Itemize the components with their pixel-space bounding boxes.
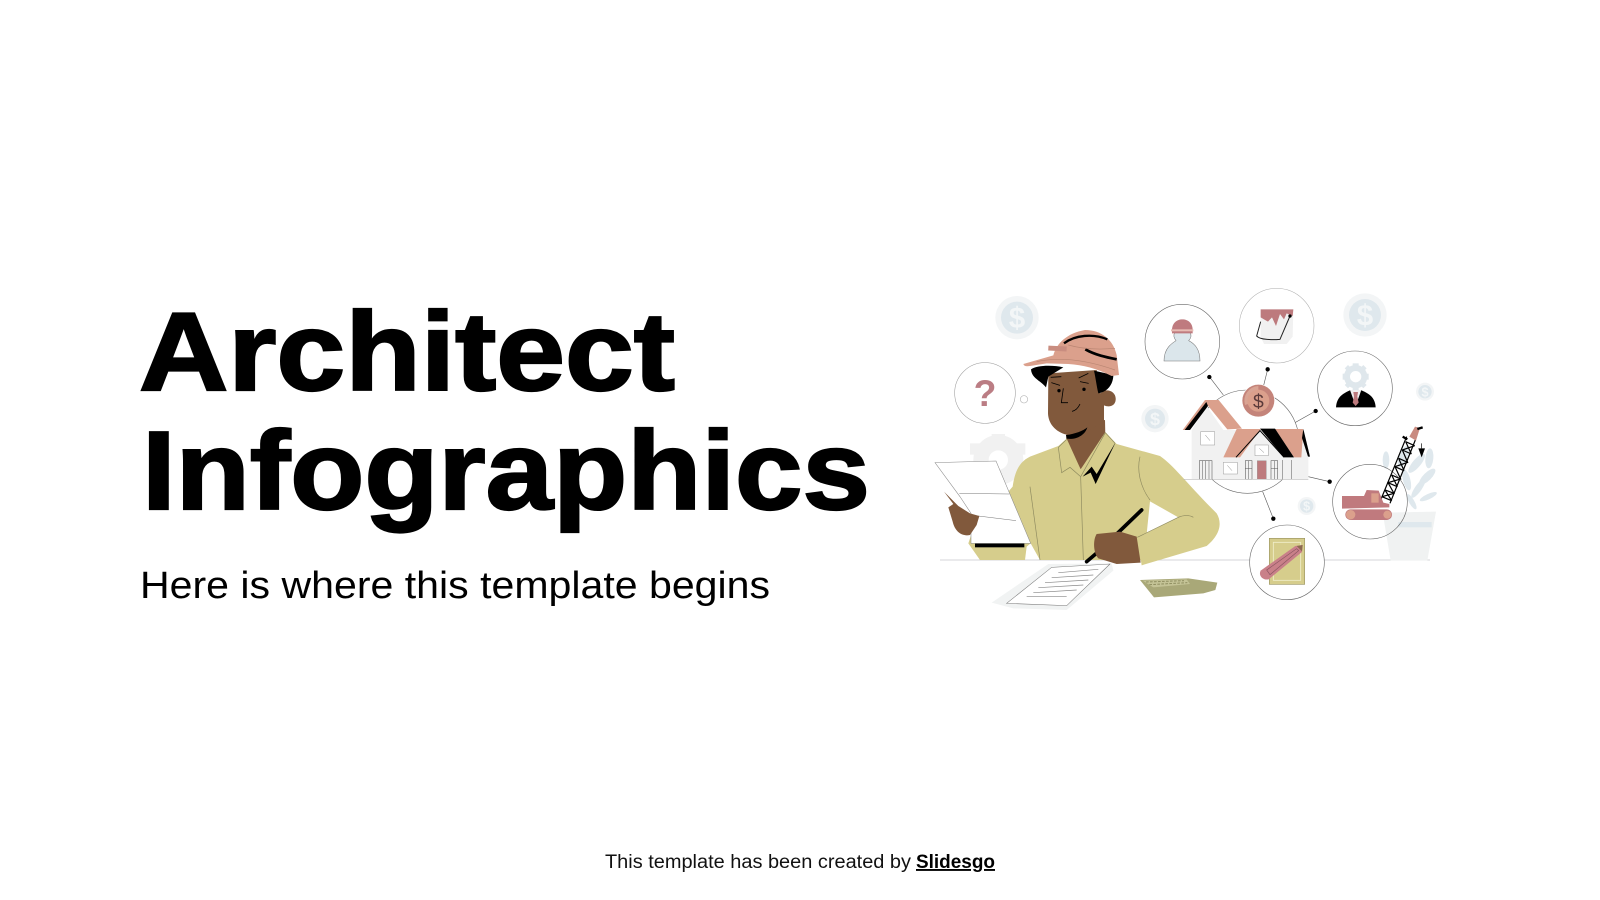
icon: dollar coin upper right: [1343, 293, 1387, 337]
subtitle: Here is where this template begins: [140, 565, 770, 607]
right hand: [1094, 532, 1141, 564]
icon: small dollar coin: $: [1150, 409, 1160, 429]
neck: [1066, 420, 1105, 469]
table line: [940, 558, 1430, 561]
credit line: This template has been created by: [605, 852, 912, 873]
icon: dollar coin lower: [1298, 497, 1316, 515]
title: Architect: [139, 290, 675, 414]
beard: [1066, 427, 1087, 439]
icon: question bubble: [955, 363, 1028, 423]
face details: [1051, 373, 1089, 411]
shirt lines: [1030, 433, 1193, 560]
person and foreground: [935, 296, 1430, 610]
title: [139, 290, 870, 533]
plant pot: [1383, 445, 1438, 561]
icon: dollar coin upper right: $: [1357, 299, 1373, 332]
document on table: [992, 563, 1113, 610]
icon: worker circle: [1145, 304, 1220, 379]
icon: paint bucket circle: [1239, 288, 1314, 363]
icon: dollar coin: [995, 296, 1039, 339]
icon: executive circle: [1318, 351, 1392, 426]
calculator: [1140, 578, 1217, 597]
icon: house: [1183, 400, 1310, 479]
icon: pencil circle: [1250, 525, 1324, 600]
central circle: [1196, 390, 1299, 493]
paper: [935, 461, 1031, 547]
icon: crane circle: [1333, 427, 1425, 539]
icon: dollar coin: $: [1009, 302, 1025, 335]
illustration: architect at desk: [935, 288, 1438, 610]
icon: question bubble: ?: [974, 372, 996, 414]
credit line: Slidesgo: [916, 852, 995, 873]
icon: dollar coin right: [1416, 383, 1434, 401]
icon: dollar coin right: $: [1421, 385, 1429, 399]
title: Infographics: [142, 409, 870, 533]
shirt: [968, 432, 1220, 565]
icon: dollar medallion: [1242, 384, 1275, 417]
icon: dollar coin lower: $: [1303, 500, 1310, 514]
icon: ghost gear: [970, 434, 1025, 477]
hard hat: [1023, 330, 1119, 376]
icon: small dollar coin: [1141, 405, 1169, 432]
pen: [1087, 510, 1142, 562]
head: [1048, 370, 1116, 435]
connector lines: [1207, 367, 1332, 521]
icon: dollar medallion: $: [1253, 392, 1264, 413]
hair: [1031, 366, 1113, 393]
hand holding paper: [944, 492, 979, 535]
network and house: [1140, 288, 1438, 600]
black collar shadow: [1083, 443, 1115, 484]
